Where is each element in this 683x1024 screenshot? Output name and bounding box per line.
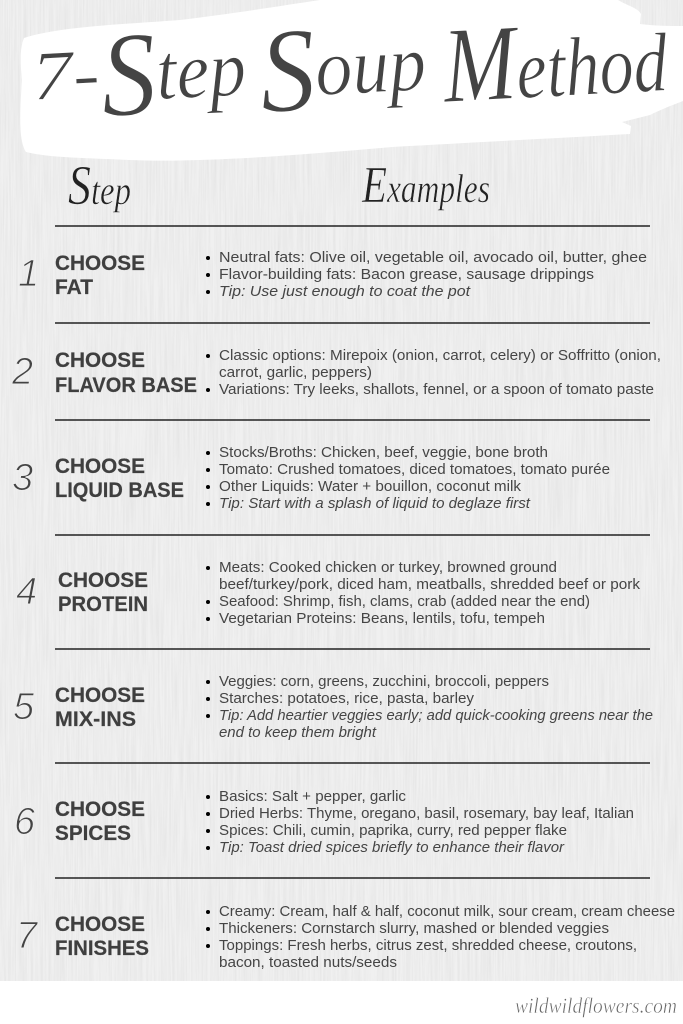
step 4 heading: CHOOSE xyxy=(58,569,148,592)
step 7 examples: Creamy: Cream, half & half, coconut milk, sour cream, cream cheese xyxy=(219,904,675,920)
step 6 heading: CHOOSE xyxy=(55,798,145,821)
step 6 examples: Basics: Salt + pepper, garlic xyxy=(219,789,406,805)
step 5 heading xyxy=(55,684,145,731)
step 3 examples: Tip: Start with a splash of liquid to deglaze first xyxy=(219,496,531,512)
step 1 examples: Tip: Use just enough to coat the pot xyxy=(219,284,471,300)
step 6 heading: SPICES xyxy=(55,822,131,845)
step 5 examples: Veggies: corn, greens, zucchini, broccoli, peppers xyxy=(219,674,549,690)
step 5 heading: CHOOSE xyxy=(55,684,145,707)
step 5 row xyxy=(13,674,653,741)
step 1 heading: FAT xyxy=(55,276,93,299)
step 7 row xyxy=(16,904,675,971)
step 3 examples: Tomato: Crushed tomatoes, diced tomatoes, tomato purée xyxy=(219,462,610,478)
title: oup xyxy=(313,19,428,113)
step 6 examples: Tip: Toast dried spices briefly to enhance their flavor xyxy=(219,840,565,856)
step 3 heading xyxy=(55,455,184,502)
step 7 heading: FINISHES xyxy=(55,937,149,960)
step 3 row xyxy=(12,445,610,512)
step 7 examples xyxy=(206,904,675,971)
step 2 heading xyxy=(55,349,197,397)
step number 2: 2 xyxy=(11,351,33,393)
step 1 examples: Flavor-building fats: Bacon grease, sausage drippings xyxy=(219,267,594,283)
step 5 heading: MIX-INS xyxy=(55,708,136,731)
step 1 examples xyxy=(206,250,647,300)
step 1 examples: Neutral fats: Olive oil, vegetable oil, avocado oil, butter, ghee xyxy=(219,250,647,266)
step 7 examples: bacon, toasted nuts/seeds xyxy=(219,955,397,971)
step 1 heading: CHOOSE xyxy=(55,252,145,275)
step 3 examples xyxy=(206,445,610,512)
title xyxy=(30,0,671,142)
step 5 examples: Tip: Add heartier veggies early; add quick-cooking greens near the xyxy=(219,708,653,724)
step 2 examples: Classic options: Mirepoix (onion, carrot, celery) or Soffritto (onion, xyxy=(219,348,661,364)
step 2 row xyxy=(11,348,661,398)
title: S xyxy=(256,2,319,138)
title: 7- xyxy=(30,36,102,116)
step 5 examples: end to keep them bright xyxy=(219,725,377,741)
step 4 heading: PROTEIN xyxy=(58,593,148,616)
step 6 examples xyxy=(206,789,634,856)
step number 7: 7 xyxy=(16,915,39,957)
step 4 examples: Seafood: Shrimp, fish, clams, crab (added near the end) xyxy=(219,594,590,610)
step 7 heading: CHOOSE xyxy=(55,913,145,936)
step 2 examples: Variations: Try leeks, shallots, fennel, or a spoon of tomato paste xyxy=(219,382,654,398)
white brush stroke behind title xyxy=(20,0,683,161)
step 6 examples: Dried Herbs: Thyme, oregano, basil, rosemary, bay leaf, Italian xyxy=(219,806,634,822)
step 2 heading: CHOOSE xyxy=(55,349,145,372)
title: S xyxy=(97,6,159,142)
step 4 examples: beef/turkey/pork, diced ham, meatballs, shredded beef or pork xyxy=(219,577,641,593)
step 3 heading: LIQUID BASE xyxy=(55,479,184,502)
step number 6: 6 xyxy=(14,801,36,843)
step 4 examples xyxy=(206,560,641,627)
step 3 heading: CHOOSE xyxy=(55,455,145,478)
step 2 examples xyxy=(206,348,661,398)
step 6 heading xyxy=(55,798,145,845)
step 2 examples: carrot, garlic, peppers) xyxy=(219,365,372,381)
step 7 examples: Toppings: Fresh herbs, citrus zest, shredded cheese, croutons, xyxy=(219,938,637,954)
step 6 row xyxy=(14,789,634,856)
step 3 examples: Other Liquids: Water + bouillon, coconut milk xyxy=(219,479,522,495)
step 1 row xyxy=(18,250,647,300)
step number 4: 4 xyxy=(16,571,37,613)
step 4 heading xyxy=(58,569,148,616)
step 1 heading xyxy=(55,252,145,299)
step 5 examples: Starches: potatoes, rice, pasta, barley xyxy=(219,691,475,707)
column heading: Examples: Examples xyxy=(361,157,490,214)
step 3 examples: Stocks/Broths: Chicken, beef, veggie, bone broth xyxy=(219,445,548,461)
step number 3: 3 xyxy=(12,457,33,499)
step 4 examples: Meats: Cooked chicken or turkey, browned ground xyxy=(219,560,557,576)
title: tep xyxy=(154,25,248,117)
step 4 examples: Vegetarian Proteins: Beans, lentils, tofu, tempeh xyxy=(219,611,545,627)
step 2 heading: FLAVOR BASE xyxy=(55,374,197,397)
step 4 row xyxy=(16,560,641,627)
step 7 examples: Thickeners: Cornstarch slurry, mashed or blended veggies xyxy=(219,921,609,937)
step 6 examples: Spices: Chili, cumin, paprika, curry, red pepper flake xyxy=(219,823,567,839)
column heading: Step: Step xyxy=(68,155,131,217)
step 7 heading xyxy=(55,913,149,960)
step number 5: 5 xyxy=(13,686,35,728)
step 5 examples xyxy=(206,674,653,741)
step number 1: 1 xyxy=(18,253,39,295)
